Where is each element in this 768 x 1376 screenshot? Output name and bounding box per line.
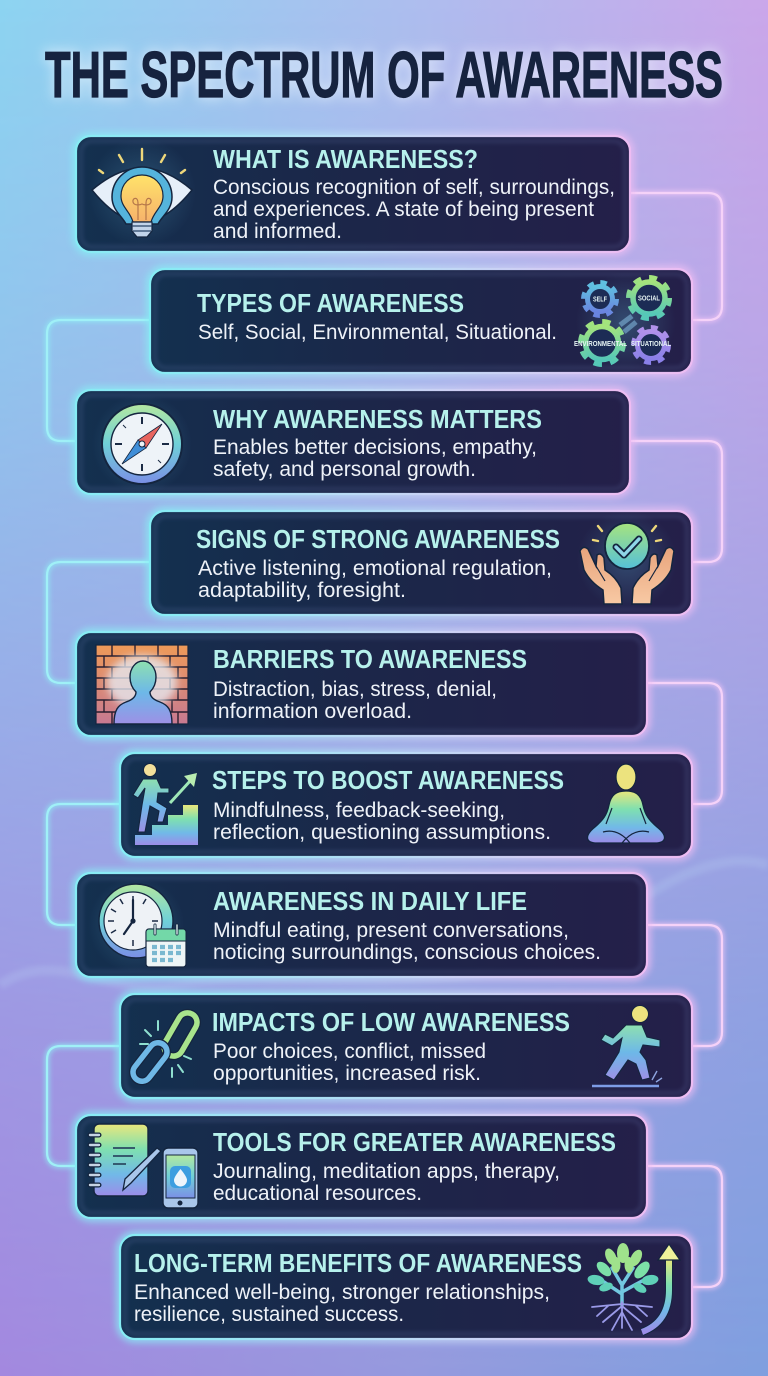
heading: TYPES OF AWARENESS — [197, 288, 464, 318]
description: information overload. — [213, 700, 412, 723]
panel: signs of strong awareness — [150, 510, 692, 615]
description: noticing surroundings, conscious choices. — [213, 941, 601, 964]
icon: four gears: SELF — [593, 296, 608, 304]
description: Mindful eating, present conversations, — [213, 919, 569, 942]
description: safety, and personal growth. — [213, 458, 476, 481]
heading: WHAT IS AWARENESS? — [213, 144, 478, 174]
icon: tree with roots and rising arrow — [587, 1243, 680, 1332]
description — [213, 1040, 486, 1085]
description: educational resources. — [213, 1182, 422, 1205]
heading: SIGNS OF STRONG AWARENESS — [196, 524, 560, 554]
panel: awareness in daily life — [76, 873, 647, 977]
description — [134, 1281, 550, 1326]
description: resilience, sustained success. — [134, 1303, 404, 1326]
description — [213, 1160, 560, 1205]
icon: four gears: ENVIRONMENTAL — [574, 341, 628, 348]
icon: clock and calendar — [88, 877, 186, 973]
panel: tools for greater awareness — [76, 1115, 647, 1218]
icon: person behind brick wall — [96, 645, 188, 724]
panel: what is awareness — [76, 136, 630, 252]
description — [213, 176, 615, 243]
heading: AWARENESS IN DAILY LIFE — [213, 886, 527, 916]
icon: broken chain link — [129, 1009, 200, 1085]
description — [213, 799, 551, 844]
description — [213, 436, 537, 481]
description — [198, 557, 552, 602]
heading: WHY AWARENESS MATTERS — [213, 404, 542, 434]
connectors between cards — [47, 193, 722, 1287]
description: Mindfulness, feedback-seeking, — [213, 799, 505, 822]
panel: impacts of low awareness — [120, 994, 692, 1098]
description: adaptability, foresight. — [198, 579, 406, 602]
description — [213, 919, 601, 964]
description: opportunities, increased risk. — [213, 1062, 481, 1085]
heading: BARRIERS TO AWARENESS — [213, 644, 527, 674]
panel: barriers to awareness — [76, 632, 647, 736]
description: reflection, questioning assumptions. — [213, 821, 551, 844]
panel: types of awareness — [150, 269, 692, 373]
description: Enhanced well-being, stronger relationships, — [134, 1281, 550, 1304]
icon: four gears: SOCIAL — [638, 296, 661, 302]
icon: four gears — [574, 272, 676, 372]
description: and informed. — [213, 220, 342, 243]
panel: steps to boost awareness — [120, 753, 692, 857]
description — [213, 678, 497, 723]
description: Journaling, meditation apps, therapy, — [213, 1160, 560, 1183]
description: Enables better decisions, empathy, — [213, 436, 537, 459]
icon: person climbing stairs — [133, 764, 198, 845]
panel: why awareness matters — [76, 390, 630, 494]
description: Active listening, emotional regulation, — [198, 557, 552, 580]
icon: journal, pen and phone — [90, 1124, 198, 1208]
icon: walking person stumbling — [592, 1006, 662, 1086]
icon: compass — [92, 394, 192, 494]
icon: four gears: SITUATIONAL — [631, 341, 672, 348]
panel: long-term benefits of awareness — [120, 1235, 692, 1339]
heading: TOOLS FOR GREATER AWARENESS — [213, 1127, 616, 1157]
description: Conscious recognition of self, surroundings, — [213, 176, 615, 199]
description: Self, Social, Environmental, Situational. — [198, 321, 557, 344]
heading: LONG-TERM BENEFITS OF AWARENESS — [134, 1248, 582, 1278]
heading: STEPS TO BOOST AWARENESS — [212, 765, 564, 795]
description: Distraction, bias, stress, denial, — [213, 678, 497, 701]
heading: IMPACTS OF LOW AWARENESS — [212, 1007, 570, 1037]
icon: meditating person — [588, 764, 664, 843]
icon: hands holding check mark — [577, 510, 677, 610]
description: Poor choices, conflict, missed — [213, 1040, 486, 1063]
icon: eye with light bulb — [88, 138, 196, 246]
description: and experiences. A state of being present — [213, 198, 594, 221]
